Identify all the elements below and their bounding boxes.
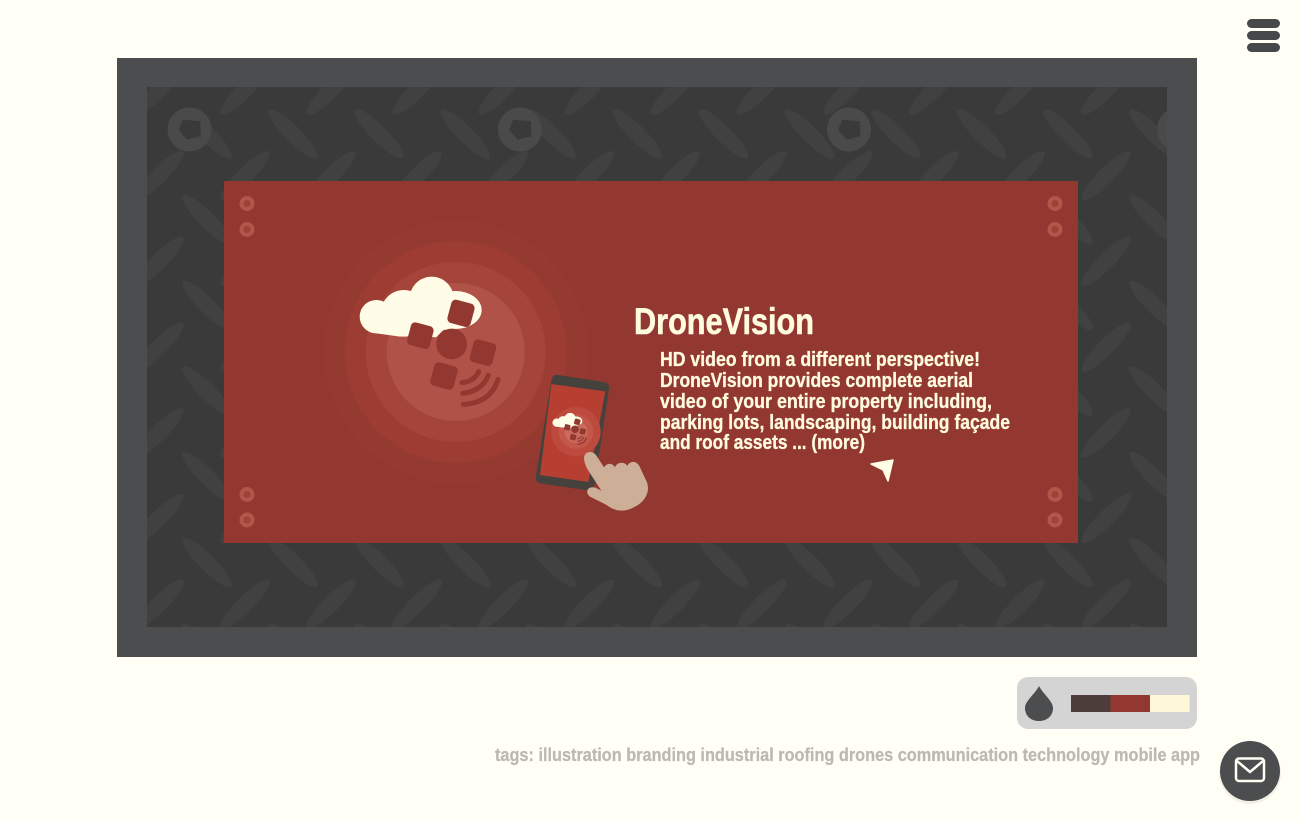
panel: red feature card — [224, 181, 1078, 543]
description text: HD video from a different perspective! — [660, 349, 980, 371]
icon: envelope — [1236, 758, 1264, 781]
icon: drop — [1025, 686, 1053, 721]
button: mail — [1219, 741, 1281, 804]
illustration: drone under cloud — [360, 277, 498, 404]
description text: parking lots, landscaping, building façade — [660, 412, 1010, 434]
illustration: phone with hand — [536, 375, 648, 511]
illustration: concentric signal rings — [324, 220, 588, 484]
diamond plate pattern — [147, 87, 1167, 627]
tags: tags: illustration branding industrial roofing drones communication technology mobile app — [495, 745, 1200, 765]
panel: steel frame — [117, 58, 1201, 657]
colour palette — [1017, 677, 1197, 729]
bolts — [168, 108, 1201, 152]
description text: video of your entire property including, — [660, 391, 992, 413]
title: DroneVision — [634, 301, 814, 342]
description text — [660, 349, 1010, 454]
icon: cursor arrow — [871, 460, 893, 481]
description text: DroneVision provides complete aerial — [660, 370, 973, 392]
description text: and roof assets ... (more) — [660, 432, 865, 454]
icon: menu — [1247, 19, 1280, 52]
swatches — [1071, 695, 1190, 712]
rivets — [242, 198, 1060, 526]
